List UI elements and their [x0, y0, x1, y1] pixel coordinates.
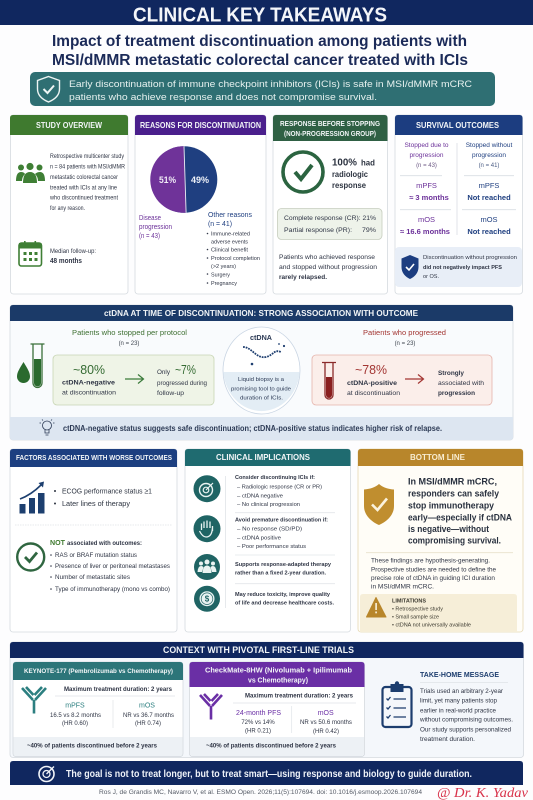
ctDNA circle: [223, 327, 300, 414]
study description: [49, 154, 126, 212]
CheckMate 24-month PFS: 24-month PFS: [236, 710, 281, 717]
pie chart: 51%: [159, 175, 176, 185]
bottom line statement: stop immunotherapy: [408, 501, 495, 512]
column: stopped due to progression: Stopped due to: [404, 142, 449, 149]
legend: disease progression: Disease: [139, 215, 161, 222]
panel: response before stopping: (NON-PROGRESSION GROUP): [284, 129, 376, 138]
study description: Retrospective multicenter study: [50, 154, 124, 160]
subtitle: MSI/dMMR metastatic colorectal cancer treated with ICIs: [52, 52, 468, 69]
may reduce toxicity: [235, 592, 334, 607]
legend: other reasons: Other reasons: [208, 212, 252, 219]
ctDNA-positive box: ctDNA-positive: [347, 380, 397, 387]
icon: shield check: [38, 76, 60, 102]
panel: response before stopping: RESPONSE BEFORE STOPPING: [280, 119, 380, 128]
100% radiologic response: 100%: [332, 156, 358, 168]
progressed heading: [363, 330, 446, 347]
column: stopped due to progression: mOS: [418, 215, 435, 224]
study description: metastatic colorectal cancer: [50, 175, 118, 181]
study description: who discontinued treatment: [49, 196, 118, 202]
ctDNA-positive box: Strongly: [438, 370, 464, 377]
study description: for any reason.: [50, 206, 85, 212]
title banner: [0, 0, 533, 26]
factors not associated: RAS or BRAF mutation status: [55, 553, 137, 559]
consider discontinuing: Consider discontinuing ICIs if:: [235, 475, 315, 481]
bottom line statement: compromising survival.: [408, 536, 501, 547]
ctDNA-positive box: associated with: [438, 380, 484, 387]
CheckMate discontinuation note: [190, 737, 364, 756]
closing banner: [10, 761, 523, 785]
consider discontinuing: – Radiologic response (CR or PR): [237, 485, 322, 491]
consider discontinuing: – No clinical progression: [237, 502, 300, 508]
study description: n = 84 patients with MSI/dMMR: [50, 164, 126, 170]
card: CheckMate-8HW: CheckMate-8HW (Nivolumab + Ipilimumab: [205, 668, 352, 675]
icon: team: [194, 554, 220, 580]
legend: other reasons: Protocol completion: [211, 256, 260, 262]
subtitle: [52, 33, 468, 69]
100% radiologic response: had: [361, 158, 375, 168]
legend: disease progression: progression: [139, 224, 172, 231]
panel: context with pivotal trials: [10, 642, 524, 758]
key message banner: patients who achieve response and does not compromise survival.: [69, 92, 377, 103]
limitations box: • Retrospective study: [392, 606, 443, 612]
factors not associated: [50, 538, 170, 593]
response rates box: [278, 208, 382, 240]
CheckMate mOS: [300, 710, 352, 735]
icon: target: [194, 475, 220, 502]
per-protocol heading: (n = 23): [119, 341, 139, 347]
per-protocol heading: [72, 330, 187, 347]
bottom line statement: [408, 476, 512, 547]
hypothesis note: in MSI/dMMR mCRC.: [371, 585, 434, 591]
column: stopped without progression: Stopped without: [466, 142, 512, 149]
KEYNOTE-177 mOS: (HR 0.74): [135, 721, 161, 727]
icon: warning triangle: [366, 598, 386, 617]
supports response-adapted therapy: [235, 562, 332, 576]
panel: survival outcomes: SURVIVAL OUTCOMES: [416, 120, 499, 130]
avoid premature discontinuation: [235, 517, 328, 550]
column: stopped without progression: mOS: [480, 215, 498, 224]
closing banner: The goal is not to treat longer, but to treat smart—using response and biology to guide duration.: [66, 769, 472, 780]
consider discontinuing: [235, 475, 322, 508]
response rates box: 79%: [362, 227, 376, 234]
consider discontinuing: – ctDNA negative: [237, 494, 283, 500]
legend: other reasons: Clinical benefit: [211, 247, 248, 253]
take-home message: Our study supports personalized: [420, 726, 512, 733]
median follow-up: 48 months: [50, 258, 82, 265]
KEYNOTE-177 mOS: NR vs 36.7 months: [123, 713, 174, 719]
icon: dollar coin: [194, 586, 220, 612]
icon: green check circle: [17, 544, 44, 570]
ctDNA-positive box: ~78%: [355, 362, 387, 377]
column: stopped due to progression: [400, 142, 450, 236]
subtitle: Impact of treatment discontinuation among patients with: [52, 33, 467, 50]
legend: other reasons: Pregnancy: [211, 281, 237, 287]
ctDNA circle: duration of ICIs.: [240, 396, 283, 402]
icon: teal antibody: [22, 687, 46, 714]
factors not associated: Number of metastatic sites: [55, 575, 130, 581]
progressed heading: Patients who progressed: [363, 330, 446, 337]
column: stopped due to progression: ≈ 16.6 months: [400, 227, 450, 236]
ctDNA circle: promising tool to guide: [231, 386, 291, 392]
factors not associated: associated with outcomes:: [67, 540, 142, 547]
KEYNOTE-177 discontinuation note: ~40% of patients discontinued before 2 years: [27, 744, 158, 750]
CheckMate mOS: NR vs 50.6 months: [300, 720, 352, 726]
panel: study overview: STUDY OVERVIEW: [36, 120, 103, 130]
survival callout: or OS.: [423, 274, 439, 280]
limitations box: • ctDNA not universally available: [392, 622, 471, 628]
KEYNOTE-177 mPFS: (HR 0.60): [62, 721, 88, 727]
icon: calendar: [19, 241, 42, 266]
arrow: green: [125, 374, 144, 384]
limitations box: LIMITATIONS: [392, 598, 427, 604]
median follow-up: [50, 248, 96, 265]
factors not associated: NOT: [50, 538, 65, 547]
column: stopped due to progression: (n = 43): [416, 163, 437, 169]
ctDNA takeaway strip: ctDNA-negative status suggests safe discontinuation; ctDNA-positive status indicates higher risk of relapse.: [63, 424, 442, 433]
factors not associated: Presence of liver or peritoneal metastases: [55, 564, 170, 570]
citation: Ros J, de Grandis MC, Navarro V, et al. ESMO Open. 2026;11(5):107694. doi: 10.1016/j.esmoop.2026.107694: [99, 789, 423, 796]
limitations box: • Small sample size: [392, 614, 439, 620]
key message banner: Early discontinuation of immune checkpoint inhibitors (ICIs) is safe in MSI/dMMR mCRC: [69, 79, 472, 90]
worse outcome factors: Later lines of therapy: [62, 499, 130, 508]
KEYNOTE-177 mPFS: [50, 703, 101, 727]
CheckMate 24-month PFS: (HR 0.21): [245, 729, 271, 735]
icon: stop hand: [194, 515, 220, 542]
ctDNA-positive box: [312, 355, 492, 405]
icon: clipboard: [382, 681, 412, 727]
panel: factors associated with worse outcomes: FACTORS ASSOCIATED WITH WORSE OUTCOMES: [16, 453, 172, 462]
panel: factors associated with worse outcomes: [10, 449, 177, 632]
icon: dollar coin: $: [205, 594, 210, 604]
ctDNA-positive box: at discontinuation: [347, 390, 400, 397]
survival callout: [395, 247, 522, 287]
bottom line statement: is negative—without: [408, 524, 490, 535]
KEYNOTE-177 mPFS: mPFS: [65, 703, 85, 710]
icon: red test tube: [322, 362, 336, 399]
KEYNOTE-177 mOS: mOS: [139, 703, 155, 710]
ctDNA-negative box: progressed during: [157, 380, 207, 387]
legend: other reasons: Surgery: [211, 272, 230, 278]
card: KEYNOTE-177: Maximum treatment duration: 2 years: [64, 687, 173, 693]
CheckMate 24-month PFS: 72% vs 14%: [241, 720, 275, 726]
pie chart: 49%: [191, 175, 209, 185]
CheckMate mOS: mOS: [318, 710, 334, 717]
ctDNA-negative box: [53, 355, 214, 405]
icon: DNA strand: [243, 343, 285, 365]
avoid premature discontinuation: – Poor performance status: [237, 544, 306, 550]
legend: other reasons: [207, 212, 260, 287]
panel: survival outcomes: [395, 115, 522, 294]
bottom line statement: early—especially if ctDNA: [408, 512, 512, 523]
column: stopped without progression: progression: [472, 152, 506, 159]
survival callout: did not negatively impact PFS: [423, 265, 502, 271]
ctDNA takeaway strip: [10, 417, 513, 440]
limitations box: [360, 594, 517, 632]
supports response-adapted therapy: Supports response-adapted therapy: [235, 562, 332, 568]
ctDNA circle: Liquid biopsy is a: [238, 377, 285, 383]
response note: Patients who achieved response: [279, 254, 375, 261]
panel: clinical implications: [185, 449, 350, 632]
median follow-up: Median follow-up:: [50, 248, 96, 255]
100% radiologic response: response: [332, 180, 366, 190]
ctDNA circle: ctDNA: [250, 335, 272, 342]
100% radiologic response: radiologic: [332, 169, 368, 179]
hypothesis note: precise role of ctDNA in guiding ICI duration: [371, 576, 495, 582]
column: stopped without progression: [466, 142, 512, 236]
KEYNOTE-177 discontinuation note: [14, 737, 182, 756]
column: stopped due to progression: ≈ 3 months: [409, 193, 449, 202]
take-home message: [419, 670, 513, 743]
panel: bottom line: [358, 449, 523, 632]
panel: reasons for discontinuation: REASONS FOR DISCONTINUATION: [140, 120, 261, 130]
column: stopped without progression: Not reached: [467, 193, 511, 202]
panel: ctDNA: [10, 305, 513, 440]
ctDNA-positive box: progression: [438, 390, 475, 397]
panel: study overview: [10, 115, 128, 294]
CheckMate mOS: (HR 0.42): [313, 729, 339, 735]
card: CheckMate-8HW: Maximum treatment duration: 2 years: [245, 694, 354, 700]
icon: light bulb: [40, 420, 54, 435]
legend: other reasons: Immune-related: [211, 231, 250, 237]
card: KEYNOTE-177: [13, 662, 183, 756]
avoid premature discontinuation: – ctDNA positive: [237, 536, 281, 542]
supports response-adapted therapy: rather than a fixed 2-year duration.: [235, 570, 326, 576]
icon: navy shield: [402, 255, 418, 279]
key message banner: [30, 72, 495, 106]
column: stopped due to progression: progression: [410, 152, 444, 159]
take-home message: Trials used an arbitrary 2-year: [420, 688, 503, 695]
panel: response before stopping: [273, 115, 388, 294]
ctDNA-negative box: ~7%: [175, 362, 196, 377]
KEYNOTE-177 mPFS: 16.5 vs 8.2 months: [50, 713, 101, 719]
legend: disease progression: (n = 43): [139, 233, 160, 240]
progressed heading: (n = 23): [395, 341, 415, 347]
title banner: CLINICAL KEY TAKEAWAYS: [133, 4, 387, 26]
hypothesis note: These findings are hypothesis-generating.: [371, 559, 490, 565]
study description: treated with ICIs at any line: [50, 186, 118, 192]
card: CheckMate-8HW: vs Chemotherapy): [248, 678, 308, 685]
legend: disease progression: [139, 215, 172, 240]
icon: rising bars: [20, 482, 44, 514]
legend: other reasons: (>2 years): [211, 264, 236, 270]
ctDNA-negative box: Only: [157, 369, 171, 376]
survival callout: Discontinuation without progression: [423, 255, 517, 261]
ctDNA-negative box: at discontinuation: [62, 390, 116, 397]
arrow: red: [405, 374, 424, 384]
icon: target: [39, 766, 54, 782]
response rates box: Complete response (CR): 21%: [284, 215, 376, 222]
hypothesis note: [371, 559, 497, 591]
response rates box: Partial response (PR):: [284, 227, 352, 234]
response note: and stopped without progression: [279, 264, 377, 271]
factors not associated: Type of immunotherapy (mono vs combo): [55, 587, 170, 593]
hypothesis note: Prospective studies are needed to define the: [371, 567, 497, 573]
worse outcome factors: ECOG performance status ≥1: [62, 487, 152, 496]
panel: context with pivotal trials: CONTEXT WITH PIVOTAL FIRST-LINE TRIALS: [163, 645, 354, 655]
take-home message: limit, yet many patients stop: [420, 698, 498, 705]
panel: bottom line: BOTTOM LINE: [410, 452, 465, 462]
icon: gold shield: [364, 484, 394, 525]
take-home message: TAKE-HOME MESSAGE: [420, 670, 499, 679]
may reduce toxicity: May reduce toxicity, improve quality: [235, 592, 331, 598]
KEYNOTE-177 mOS: [123, 703, 174, 727]
per-protocol heading: Patients who stopped per protocol: [72, 330, 187, 337]
icon: people: [16, 163, 45, 183]
icon: check circle: [283, 152, 323, 192]
take-home message: treatment duration.: [420, 736, 475, 743]
CheckMate 24-month PFS: [236, 710, 281, 735]
avoid premature discontinuation: – No response (SD/PD): [237, 527, 302, 533]
CheckMate discontinuation note: ~40% of patients discontinued before 2 years: [206, 744, 337, 750]
ctDNA-negative box: ~80%: [73, 362, 105, 377]
column: stopped without progression: (n = 41): [479, 163, 499, 169]
panel: ctDNA: ctDNA AT TIME OF DISCONTINUATION: STRONG ASSOCIATION WITH OUTCOME: [104, 308, 418, 318]
panel: reasons for discontinuation: [135, 115, 266, 294]
take-home message: without compromising outcomes.: [419, 717, 513, 724]
icon: purple antibody: [200, 694, 222, 720]
worse outcome factors: [54, 487, 152, 508]
100% radiologic response: [332, 156, 375, 190]
avoid premature discontinuation: Avoid premature discontinuation if:: [235, 517, 328, 523]
panel: clinical implications: CLINICAL IMPLICATIONS: [216, 452, 310, 462]
ctDNA-negative box: follow-up: [157, 390, 184, 397]
bottom line statement: In MSI/dMMR mCRC,: [408, 476, 497, 487]
may reduce toxicity: of life and decrease healthcare costs.: [235, 601, 334, 607]
card: CheckMate-8HW: [190, 662, 364, 756]
icon: green test tube and drop: [17, 344, 44, 387]
pie chart: [150, 146, 217, 213]
response note: [279, 254, 377, 281]
legend: other reasons: (n = 41): [208, 221, 232, 228]
column: stopped due to progression: mPFS: [416, 181, 437, 190]
take-home message: earlier in real-world practice: [420, 707, 497, 714]
bottom line statement: responders can safely: [408, 488, 500, 499]
legend: other reasons: adverse events: [211, 239, 248, 245]
column: stopped without progression: mPFS: [479, 181, 499, 190]
response note: rarely relapsed.: [279, 274, 327, 281]
ctDNA-negative box: ctDNA-negative: [62, 380, 115, 387]
column: stopped without progression: Not reached: [467, 227, 511, 236]
card: KEYNOTE-177: KEYNOTE-177 (Pembrolizumab vs Chemotherapy): [24, 668, 173, 675]
